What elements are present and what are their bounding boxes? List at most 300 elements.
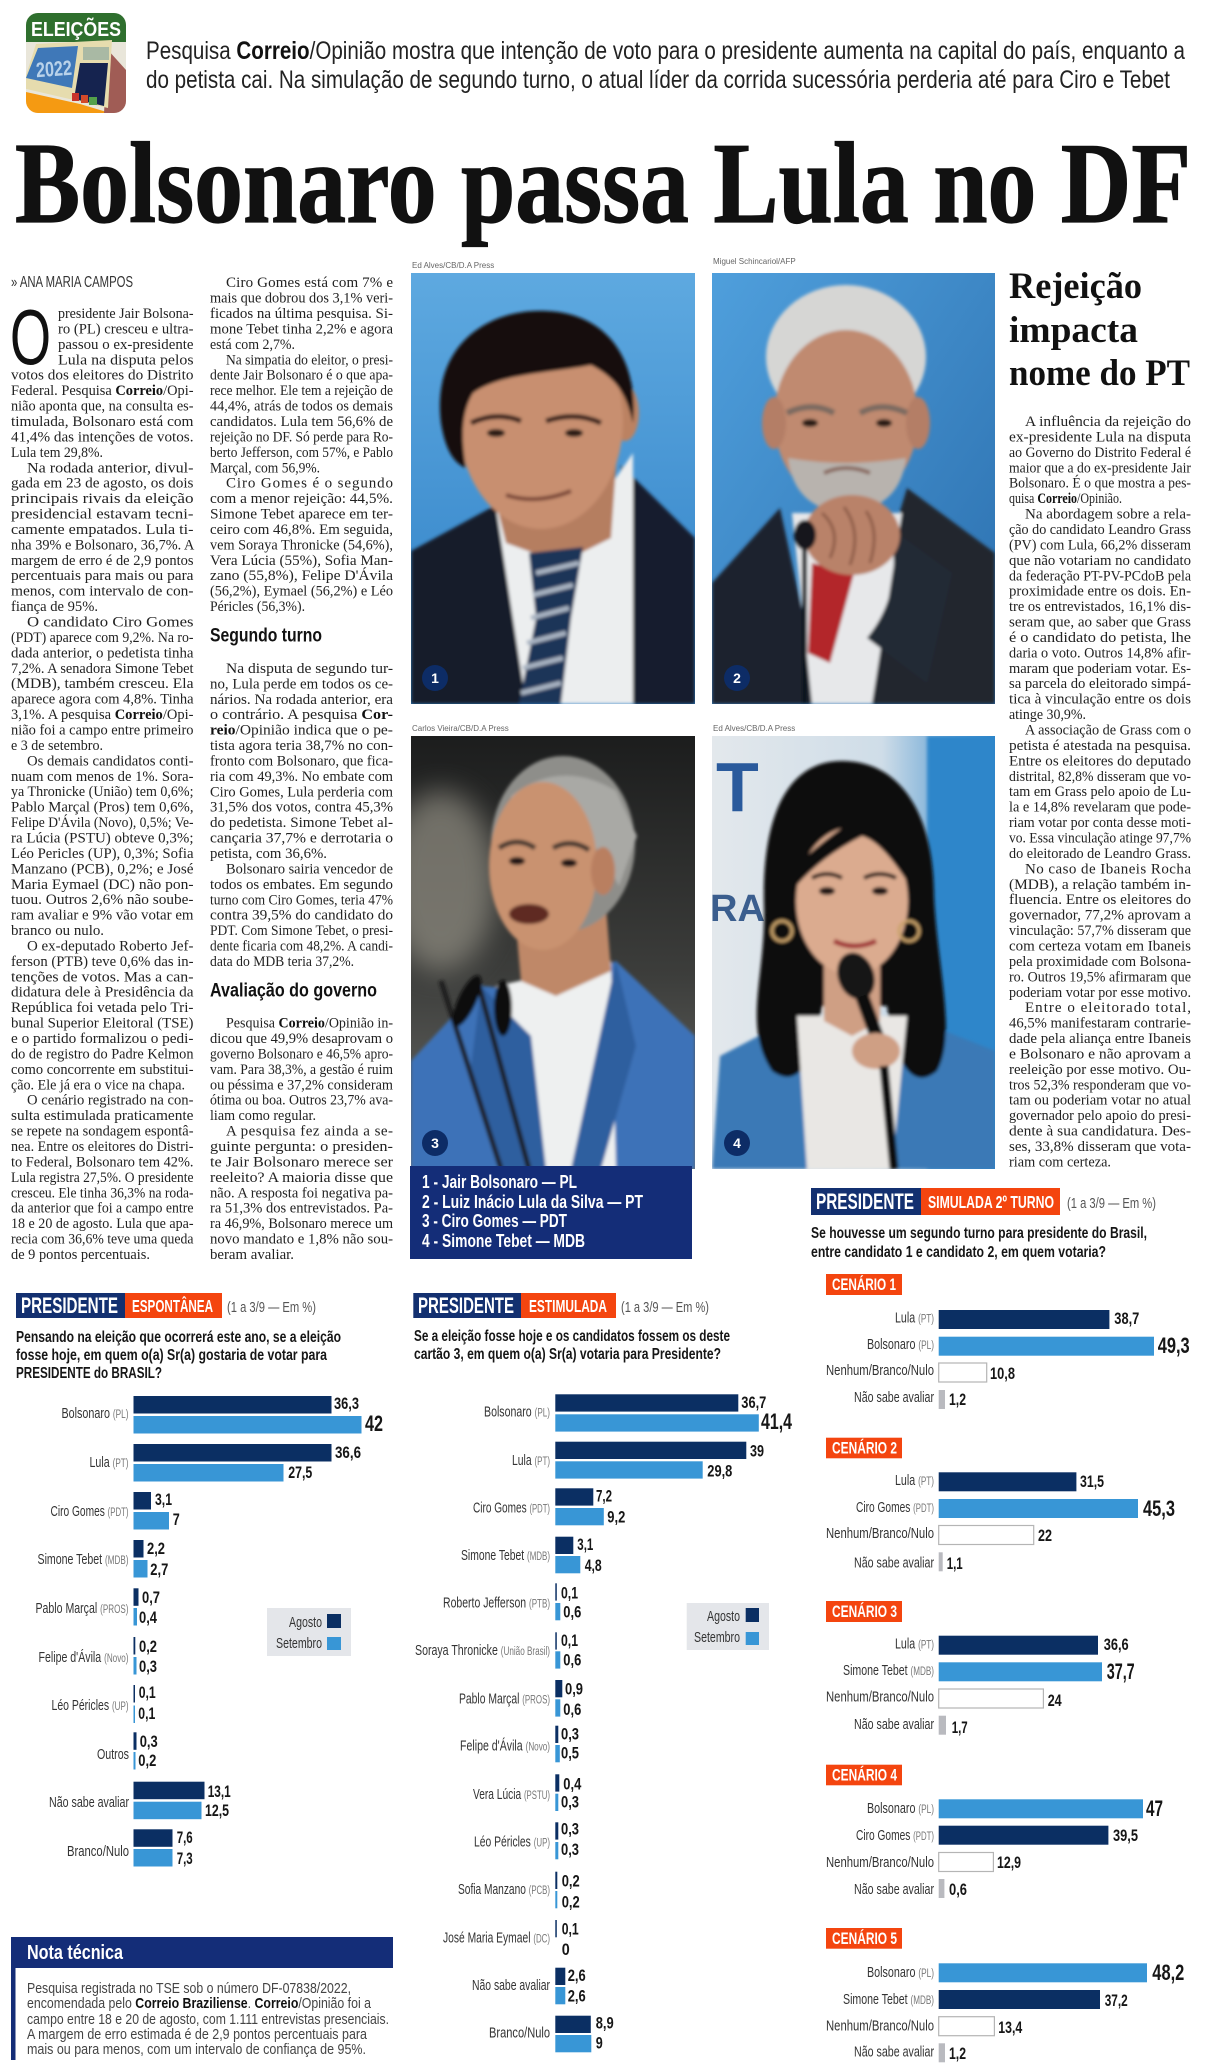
article column 1: como concorrente em substitui-: [11, 1062, 194, 1078]
article column 2, segundo turno block: Na disputa de segundo tur-: [226, 661, 393, 677]
row: Lula: 39: [750, 1442, 764, 1461]
nota técnica body: encomendada pelo Correio Braziliense. Correio/Opinião foi a: [27, 1995, 372, 2012]
article column 1: Maria Eymael (DC) não pon-: [11, 877, 194, 893]
photo 4: Simone Tebet: T: [716, 748, 759, 826]
row: Felipe d'Ávila: 0,3: [561, 1724, 579, 1743]
article column 1: branco ou nulo.: [11, 923, 104, 939]
sidebar article text: sa parcela do eleitorado simpá-: [1009, 676, 1191, 692]
article column 1: recia com 36,6% teve uma queda: [11, 1232, 194, 1248]
row: Roberto Jefferson: Roberto Jefferson (PTB): [443, 1595, 550, 1612]
row: Lula: [90, 1443, 361, 1482]
row: Sofia Manzano: Sofia Manzano (PCB): [458, 1881, 550, 1898]
article column 2, avaliação block: ra 51,3% dos entrevistados. Pa-: [210, 1201, 393, 1217]
row: Bolsonaro: Bolsonaro (PL): [62, 1405, 129, 1422]
row: Simone Tebet: 2,7: [150, 1560, 168, 1579]
row: José Maria Eymael: 0,1: [562, 1919, 579, 1938]
row: Pablo Marçal: 0,7: [142, 1588, 160, 1607]
scenario 2: [826, 1438, 1175, 1573]
row: Branco/Nulo: Branco/Nulo: [67, 1843, 129, 1860]
article column 2, first block: berto Jefferson, com 57%, e Pablo: [210, 445, 393, 461]
credit: photo 3: Carlos Vieira/CB/D.A Press: [412, 724, 509, 733]
row: Branco/Nulo: 8,9: [596, 2013, 614, 2032]
sidebar article text: Na abordagem sobre a rela-: [1025, 507, 1191, 523]
row: Sofia Manzano: 0,2: [562, 1872, 580, 1891]
article column 1: ra Lúcia (PSTU) obteve 0,3%;: [11, 830, 194, 846]
row: Simone Tebet: Simone Tebet (MDB): [461, 1547, 550, 1564]
row: Soraya Thronicke: 0,6: [563, 1651, 581, 1670]
scenario 3: 24: [1048, 1691, 1062, 1710]
article column 2, segundo turno block: no, Lula perde em todos os ce-: [210, 676, 393, 692]
article column 1: presidente Jair Bolsona-: [58, 306, 194, 322]
article column 2, first block: Péricles (56,3%).: [210, 599, 305, 615]
sidebar article text: maram que poderiam votar. Es-: [1009, 661, 1191, 677]
scenario 3: Nenhum/Branco/Nulo: [826, 1688, 934, 1706]
icon label: eleições: ELEIÇÕES: [31, 17, 121, 41]
row: Branco/Nulo: 7,3: [177, 1849, 193, 1868]
sidebar article text: governador pelo apoio do presi-: [1009, 1108, 1191, 1124]
row: Não sabe avaliar: [472, 1966, 586, 2006]
credit: photo 1: Ed Alves/CB/D.A Press: [412, 261, 494, 270]
sidebar article text: 46,5% manifestaram contrarie-: [1009, 1016, 1191, 1032]
sidebar article text: Entre o eleitorado total,: [1025, 1000, 1191, 1016]
icon: eleições 2022 voting machine: 2022: [35, 57, 73, 82]
panel: nota técnica: [11, 1937, 393, 2060]
scenario 3: 36,6: [1104, 1635, 1129, 1654]
row: Felipe d'Ávila: 0,5: [561, 1743, 579, 1762]
number badge 3: [422, 1130, 448, 1156]
article column 1: Pablo Marçal (Pros) tem 0,6%,: [11, 800, 194, 816]
article column 2, avaliação block: ou péssima e 37,2% consideram: [210, 1077, 393, 1093]
row: Pablo Marçal: [459, 1679, 583, 1719]
number badge 2: 2: [733, 670, 741, 686]
sidebar article text: ex-presidente Lula na disputa: [1009, 429, 1191, 445]
row: Lula: 36,6: [335, 1443, 361, 1462]
question text: PRESIDENTE do BRASIL?: [16, 1365, 162, 1382]
legend: Setembro: [694, 1629, 740, 1646]
row: Léo Péricles: Léo Péricles (UP): [474, 1834, 550, 1851]
row: Bolsonaro: 41,4: [761, 1409, 793, 1434]
sidebar article text: dade pela aliança entre Ibaneis: [1009, 1031, 1191, 1047]
row: Ciro Gomes: Ciro Gomes (PDT): [50, 1503, 129, 1520]
article column 1: camente empatados. Lula ti-: [11, 522, 193, 538]
scenario 1: 10,8: [990, 1364, 1015, 1383]
sidebar headline: impacta: [1009, 310, 1138, 351]
row: Branco/Nulo: Branco/Nulo: [489, 2024, 550, 2041]
scenario 5: [826, 1928, 1184, 2063]
sidebar article text: vo. Essa vinculação atinge 97,7%: [1009, 831, 1191, 847]
chart header: presidente espontânea: [16, 1293, 316, 1318]
sidebar article text: fluencia. Entre os eleitores do: [1009, 892, 1191, 908]
row: Léo Péricles: 0,3: [561, 1819, 579, 1838]
scenario 3: [826, 1601, 1135, 1737]
scenario 1: Não sabe avaliar: [854, 1389, 934, 1406]
article column 2, first block: ceiro com 46,8%. Em seguida,: [210, 522, 393, 538]
sidebar article text: riam votar por conta desse moti-: [1009, 815, 1191, 831]
chart header: presidente estimulada: (1 a 3/9 — Em %): [621, 1299, 709, 1316]
scenario 5: Não sabe avaliar: [854, 2044, 934, 2060]
row: Lula: [512, 1442, 764, 1481]
scenario 5: 48,2: [1152, 1960, 1184, 1985]
scenario tag: [826, 1928, 902, 1949]
row: Vera Lúcia: 0,3: [561, 1793, 579, 1812]
scenario tag: CENÁRIO 3: [832, 1602, 897, 1621]
row: Léo Péricles: 0,1: [139, 1683, 156, 1702]
scenario 2: Nenhum/Branco/Nulo: [826, 1525, 934, 1542]
article column 1: nha 39% e Bolsonaro, 36,7%. A: [11, 537, 194, 553]
sidebar article text: da federação PT-PV-PCdoB pela: [1009, 568, 1191, 584]
row: Ciro Gomes: 3,1: [155, 1490, 172, 1509]
article column 1: nuam com menos de 1%. Sora-: [11, 769, 194, 785]
row: Felipe d'Ávila: Felipe d'Ávila (Novo): [38, 1649, 129, 1666]
row: Léo Péricles: [474, 1819, 579, 1859]
sidebar article text: daria o voto. Outros 14,8% afir-: [1009, 645, 1191, 661]
scenario 3: Simone Tebet (MDB): [843, 1662, 934, 1679]
nota técnica body: mais ou para menos, com um intervalo de confiança de 95%.: [27, 2041, 366, 2058]
sidebar article text: e Bolsonaro e não aprovam a: [1009, 1046, 1191, 1062]
scenario tag: [826, 1274, 902, 1295]
sidebar headline: [1009, 266, 1190, 394]
row: Léo Péricles: 0,3: [561, 1840, 579, 1859]
sidebar article text: la e 14,8% revelaram que pode-: [1009, 800, 1191, 816]
article column 2, first block: candidatos. Lula tem 56,6% de: [210, 414, 393, 430]
caption box: candidates list: 1 - Jair Bolsonaro — PL: [422, 1172, 577, 1192]
scenario 2: 1,1: [947, 1554, 963, 1573]
chart header: presidente simulada 2º turno: PRESIDENTE: [816, 1189, 914, 1214]
scenario 3: 37,7: [1107, 1659, 1135, 1684]
article column 1: Lula na disputa pelos: [58, 352, 194, 368]
credit: photo 2: Miguel Schincariol/AFP: [713, 257, 796, 266]
row: Não sabe avaliar: Não sabe avaliar: [472, 1977, 550, 1994]
article column 2, segundo turno block: fronto com Bolsonaro, que fica-: [210, 753, 393, 769]
row: Simone Tebet: [461, 1535, 602, 1575]
article column 1: dada anterior, o pedetista tinha: [11, 645, 194, 661]
sidebar headline: nome do PT: [1009, 353, 1190, 394]
row: Bolsonaro: [62, 1394, 383, 1436]
article column 1: presidencial estavam tecni-: [11, 507, 194, 523]
article column 1: Federal. Pesquisa Correio/Opi-: [11, 383, 195, 399]
article column 1: Lula tem 29,8%.: [11, 445, 103, 461]
article column 2, segundo turno block: contra 39,5% do candidato do: [210, 908, 393, 924]
legend: [687, 1603, 769, 1650]
article column 1: nião foi a campo entre primeiro: [11, 723, 194, 739]
row: Ciro Gomes: 7,2: [596, 1487, 612, 1506]
article column 1: cresceu. Ele tinha 36,3% na roda-: [11, 1185, 194, 1201]
legend: Setembro: [276, 1635, 322, 1652]
row: Branco/Nulo: [489, 2013, 614, 2052]
row: Soraya Thronicke: Soraya Thronicke (União Brasil): [415, 1642, 550, 1659]
row: Lula: 27,5: [288, 1463, 312, 1482]
row: Roberto Jefferson: 0,6: [563, 1602, 581, 1621]
article column 1: principais rivais da eleição: [11, 491, 194, 507]
article column 2, segundo turno block: Bolsonaro sairia vencedor de: [226, 861, 393, 877]
article column 1: sulta estimulada praticamente: [11, 1108, 194, 1124]
nota técnica body: A margem de erro estimada é de 2,9 pontos percentuais para: [27, 2026, 368, 2043]
article column 1: ro (PL) cresceu e ultra-: [58, 321, 194, 337]
article column 2, first block: (56,2%), Eymael (56,2%) e Léo: [210, 584, 393, 600]
number badge 4: 4: [733, 1135, 741, 1151]
article column 2, segundo turno block: reio/Opinião indica que o pe-: [210, 723, 388, 739]
nota técnica heading: Nota técnica: [27, 1942, 124, 1964]
sidebar article text: dente à sua candidatura. Des-: [1009, 1124, 1191, 1140]
row: Vera Lúcia: [473, 1774, 582, 1812]
caption box: candidates list: 4 - Simone Tebet — MDB: [422, 1231, 585, 1251]
article column 1: da anterior que foi a campo entre: [11, 1201, 194, 1217]
sidebar article text: tam ou poderiam votar no atual: [1009, 1093, 1191, 1109]
drop cap: O: [10, 293, 51, 381]
scenario 4: Nenhum/Branco/Nulo: [826, 1854, 934, 1871]
article column 1: ferson (PTB) teve 0,6% das in-: [11, 954, 194, 970]
sidebar article text: petista é atestada na pesquisa.: [1009, 738, 1191, 754]
chart header: presidente estimulada: PRESIDENTE: [418, 1293, 514, 1318]
question text: [16, 1329, 341, 1382]
article column 1: aparece agora com 4,8%. Tinha: [11, 692, 194, 708]
article column 2, avaliação block: dicou que 49,9% desaprovam o: [210, 1031, 393, 1047]
article column 2, first block: mone Tebet tinha 2,2% e agora: [210, 321, 393, 337]
row: Ciro Gomes: Ciro Gomes (PDT): [473, 1500, 550, 1517]
article column 2, first block: Vera Lúcia (55%), Sofia Man-: [210, 553, 393, 569]
row: Lula: Lula (PT): [512, 1452, 550, 1469]
number badge 1: 1: [431, 670, 439, 686]
icon: eleições 2022 voting machine: [22, 13, 126, 113]
row: José Maria Eymael: 0: [562, 1940, 570, 1959]
scenario 1: 38,7: [1114, 1309, 1139, 1328]
caption box: candidates list: 3 - Ciro Gomes — PDT: [422, 1211, 567, 1231]
sidebar article text: ao Governo do Distrito Federal é: [1009, 445, 1191, 461]
article column 2, avaliação block: ra 46,9%, Bolsonaro merece um: [210, 1216, 393, 1232]
article column 2, avaliação block: reeleito? A maioria disse que: [210, 1170, 393, 1186]
article column 2, first block: mais que dobrou dos 3,1% veri-: [210, 291, 393, 307]
article column 2, avaliação block: ótima ou boa. Outros 23,7% ava-: [210, 1093, 393, 1109]
scenario 1: Lula (PT): [895, 1310, 934, 1327]
question text: Pensando na eleição que ocorrerá este ano, se a eleição: [16, 1329, 341, 1346]
article column 2, segundo turno block: turno com Ciro Gomes, teria 47%: [210, 892, 393, 908]
row: Não sabe avaliar: 12,5: [205, 1801, 229, 1820]
panel: espontânea chart: [16, 1293, 383, 1868]
scenario 4: 0,6: [949, 1880, 967, 1899]
article column 2, avaliação block: liam como regular.: [210, 1108, 316, 1124]
sidebar article text: ro. Outros 19,5% afirmaram que: [1009, 969, 1191, 985]
row: Felipe d'Ávila: 0,3: [139, 1657, 157, 1676]
article column 1: margem de erro é de 2,9 pontos: [11, 553, 194, 569]
panel: estimulada chart: [413, 1293, 793, 2052]
row: Pablo Marçal: Pablo Marçal (PROS): [36, 1600, 129, 1617]
sidebar article text: do eleitorado de Leandro Grass.: [1009, 846, 1191, 862]
scenario 2: 31,5: [1080, 1472, 1104, 1491]
scenario 3: Não sabe avaliar: [854, 1716, 934, 1733]
row: Simone Tebet: [38, 1539, 168, 1579]
byline: » ANA MARIA CAMPOS: [11, 274, 133, 291]
subheading: segundo turno: Segundo turno: [210, 626, 322, 647]
sidebar article text: tam em Grass pelo apoio de Lu-: [1009, 784, 1191, 800]
chart header: presidente estimulada: ESTIMULADA: [529, 1296, 607, 1316]
deck text: [146, 37, 1185, 94]
article column 2, first block: Ciro Gomes é o segundo: [226, 476, 393, 492]
article column 2, avaliação block: te Jair Bolsonaro merece ser: [210, 1154, 393, 1170]
row: Ciro Gomes: 9,2: [607, 1507, 625, 1526]
article column 2, avaliação block: vam. Para 38,3%, a gestão é ruim: [210, 1062, 393, 1078]
scenario 2: Lula (PT): [895, 1472, 934, 1489]
sidebar article text: vinculação: 57,7% disseram que: [1009, 923, 1191, 939]
row: Pablo Marçal: [36, 1588, 160, 1627]
article column 2, segundo turno block: 31,5% dos votos, contra 45,3%: [210, 800, 393, 816]
sidebar article text: riam com certeza.: [1009, 1154, 1111, 1170]
article column 2, avaliação block: governo Bolsonaro e 46,5% apro-: [210, 1046, 393, 1062]
row: Pablo Marçal: 0,4: [139, 1608, 157, 1627]
article column 2, first block: com a menor rejeição: 44,5%.: [210, 491, 393, 507]
article column 1: do de registro do Padre Kelmon: [11, 1046, 194, 1062]
panel: simulada 2º turno chart: [811, 1188, 1190, 2063]
article column 2, segundo turno block: ria com 49,3%. No embate com: [210, 769, 393, 785]
row: Felipe d'Ávila: [460, 1724, 579, 1762]
question text: Se a eleição fosse hoje e os candidatos fossem os deste: [414, 1328, 730, 1345]
article column 2, first block: está com 2,7%.: [210, 337, 295, 353]
subheading: avaliação do governo: Avaliação do governo: [210, 981, 377, 1002]
row: Soraya Thronicke: 0,1: [561, 1631, 578, 1650]
row: Roberto Jefferson: [443, 1583, 581, 1621]
row: Lula: Lula (PT): [90, 1454, 129, 1471]
scenario 1: Bolsonaro (PL): [867, 1336, 934, 1353]
chart header: presidente simulada 2º turno: SIMULADA 2º TURNO: [928, 1192, 1054, 1212]
row: Ciro Gomes: [473, 1487, 625, 1526]
article column 1: didatura dele à Presidência da: [11, 985, 194, 1001]
nota técnica body: Pesquisa registrada no TSE sob o número DF-07838/2022,: [27, 1980, 351, 1997]
chart header: presidente simulada 2º turno: (1 a 3/9 — Em %): [1067, 1195, 1156, 1212]
row: Lula: 29,8: [707, 1462, 732, 1481]
article column 1: nea. Entre os eleitores do Distri-: [11, 1139, 194, 1155]
sidebar article text: Entre os eleitores do deputado: [1009, 753, 1191, 769]
row: Não sabe avaliar: 13,1: [208, 1782, 231, 1801]
row: Simone Tebet: 2,2: [147, 1539, 165, 1558]
number badge 1: [422, 665, 448, 691]
row: Não sabe avaliar: 2,6: [568, 1966, 586, 1985]
article column 1: se repete na sondagem espontâ-: [11, 1124, 194, 1140]
scenario 4: [826, 1765, 1163, 1899]
scenario 2: Não sabe avaliar: [854, 1554, 934, 1572]
article column 1: percentuais para mais ou para: [11, 568, 194, 584]
article column 2, first block: zano (55,8%), Felipe D'Ávila: [210, 567, 393, 584]
scenario 4: Bolsonaro (PL): [867, 1800, 934, 1817]
article column 2, first block: 44,4%, atrás de todos os demais: [210, 399, 393, 415]
scenario 4: 47: [1146, 1796, 1163, 1821]
row: Simone Tebet: Simone Tebet (MDB): [38, 1551, 129, 1568]
nota técnica body: campo entre 18 e 20 de agosto, com 1.111 entrevistas presenciais.: [27, 2011, 389, 2028]
article column 1: tuou. Outros 2,6% não soube-: [11, 892, 194, 908]
article column 1: (MDB), também cresceu. Ela: [11, 676, 194, 692]
article column 1: votos dos eleitores do Distrito: [11, 368, 193, 384]
article column 2, segundo turno block: petista, com 36,6%.: [210, 846, 327, 862]
article column 1: 7,2%. A senadora Simone Tebet: [11, 661, 194, 677]
article column 1: passou o ex-presidente: [58, 337, 194, 353]
article column 1: Lula registra 27,5%. O presidente: [11, 1170, 194, 1186]
row: Bolsonaro: 36,3: [334, 1394, 359, 1413]
row: Ciro Gomes: 7: [173, 1510, 180, 1529]
row: Felipe d'Ávila: [38, 1637, 157, 1676]
chart header: presidente simulada 2º turno: [811, 1188, 1156, 1215]
chart header: presidente espontânea: PRESIDENTE: [21, 1293, 118, 1318]
article column 1: menos, com intervalo de con-: [11, 584, 194, 600]
legend: [267, 1608, 351, 1656]
scenario tag: CENÁRIO 2: [832, 1438, 897, 1458]
row: Léo Péricles: 0,1: [138, 1704, 155, 1723]
row: Pablo Marçal: 0,9: [565, 1679, 583, 1698]
row: Bolsonaro: 42: [365, 1411, 383, 1436]
article column 1: Na rodada anterior, divul-: [27, 460, 194, 476]
photo 4: Simone Tebet: [710, 736, 995, 1169]
row: José Maria Eymael: José Maria Eymael (DC): [443, 1929, 550, 1946]
scenario tag: CENÁRIO 1: [832, 1275, 896, 1294]
sidebar article text: (PV) com Lula, 66,2% disseram: [1009, 537, 1191, 553]
scenario 3: 1,7: [952, 1718, 968, 1737]
article column 2, segundo turno block: dente ficaria com 48,2%. A candi-: [210, 939, 393, 955]
caption box: candidates list: 2 - Luiz Inácio Lula da Silva — PT: [422, 1192, 643, 1212]
row: Pablo Marçal: 0,6: [563, 1700, 581, 1719]
row: Outros: [97, 1732, 158, 1770]
scenario 4: 12,9: [997, 1853, 1021, 1872]
article column 1: bunal Superior Eleitoral (TSE): [11, 1016, 194, 1032]
article column 1: ya Thronicke (União) tem 0,6%;: [11, 784, 194, 800]
article column 2, segundo turno block: todos os embates. Em segundo: [210, 877, 393, 893]
article column 2, segundo turno block: nários. Na rodada anterior, era: [210, 692, 393, 708]
photo 2: Lula: [712, 273, 995, 704]
scenario 1: 49,3: [1158, 1333, 1190, 1358]
article column 2, segundo turno block: tista agora teria 38,7% no con-: [210, 738, 393, 754]
article column 1: ção. Ele já era o vice na chapa.: [11, 1077, 185, 1093]
article column 2, first block: Simone Tebet aparece em ter-: [210, 507, 393, 523]
article column 1: O candidato Ciro Gomes: [27, 615, 194, 631]
row: Não sabe avaliar: Não sabe avaliar: [49, 1794, 129, 1811]
sidebar article text: com certeza votam em Ibaneis: [1009, 938, 1191, 954]
caption box: candidates list: [410, 1166, 692, 1259]
article column 2, first block: ficados na última pesquisa. Si-: [210, 306, 393, 322]
scenario tag: [826, 1601, 902, 1622]
scenario 2: 22: [1038, 1526, 1052, 1545]
article column 2, segundo turno block: do pedetista. Simone Tebet al-: [210, 815, 393, 831]
row: Ciro Gomes: [50, 1490, 180, 1530]
sidebar article text: seram que, ao saber que Grass: [1009, 615, 1191, 631]
sidebar headline: Rejeição: [1009, 266, 1142, 307]
row: Vera Lúcia: 0,4: [563, 1774, 582, 1793]
nota técnica body: [27, 1980, 389, 2058]
scenario 5: 37,2: [1105, 1991, 1128, 2010]
row: Vera Lúcia: Vera Lúcia (PSTU): [473, 1786, 550, 1803]
scenario 2: Ciro Gomes (PDT): [856, 1499, 934, 1516]
article column 1: República foi vetada pelo Tri-: [11, 1000, 194, 1016]
scenario 2: 45,3: [1143, 1496, 1175, 1521]
row: Branco/Nulo: [67, 1828, 193, 1868]
sidebar article text: (MDB), a relação também in-: [1009, 877, 1191, 893]
row: Pablo Marçal: Pablo Marçal (PROS): [459, 1690, 550, 1707]
photo 3: Ciro Gomes: [411, 736, 695, 1169]
article column 2, first block: rece melhor. Ele tem a rejeição de: [210, 383, 393, 399]
row: Simone Tebet: 4,8: [585, 1556, 602, 1575]
sidebar article text: quisa Correio/Opinião.: [1009, 491, 1133, 507]
scenario 5: 1,2: [949, 2044, 966, 2063]
article column 1: de 9 pontos percentuais.: [11, 1247, 150, 1263]
article column 1: fiança de 95%.: [11, 599, 98, 615]
article column 2, avaliação block: não. A resposta foi negativa pa-: [210, 1185, 393, 1201]
sidebar article text: é o candidato do petista, lhe: [1009, 630, 1191, 646]
row: Branco/Nulo: 9: [596, 2033, 603, 2052]
sidebar article text: tros 52,3% responderam que vo-: [1009, 1077, 1191, 1093]
row: Sofia Manzano: 0,2: [562, 1892, 580, 1911]
sidebar article text: atinge 30,9%.: [1009, 707, 1086, 723]
scenario 3: Lula (PT): [895, 1636, 934, 1652]
question text: cartão 3, em quem o(a) Sr(a) votaria para Presidente?: [414, 1346, 721, 1363]
article column 2, avaliação block: novo mandato e 1,8% não sou-: [210, 1232, 393, 1248]
article column 2, first block: dente Jair Bolsonaro é o que apa-: [210, 368, 393, 384]
article column 2, avaliação block: Pesquisa Correio/Opinião in-: [226, 1016, 398, 1032]
article column 1: (PDT) aparece com 9,2%. Na ro-: [11, 630, 194, 646]
